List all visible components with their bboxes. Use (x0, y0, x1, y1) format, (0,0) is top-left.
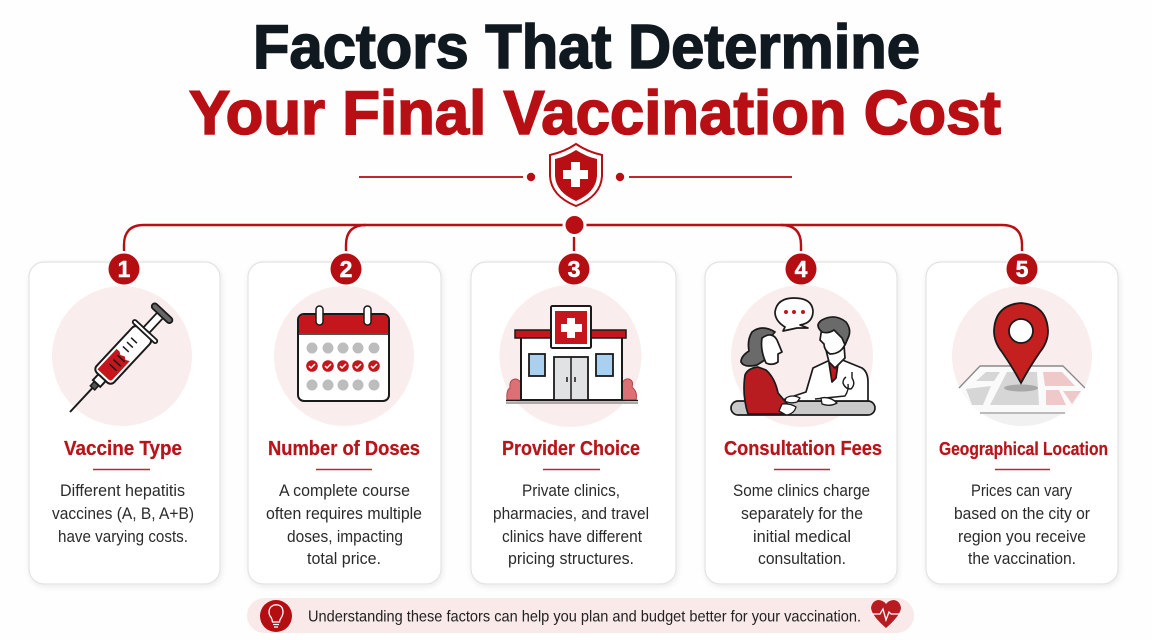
number badges: 4 (795, 256, 808, 282)
description: Some clinics charge (733, 482, 870, 500)
panel: consultation fees (705, 262, 897, 584)
table (731, 401, 875, 415)
heading: Consultation Fees (724, 438, 882, 460)
description: separately for the (741, 505, 863, 523)
icon: syringe (58, 300, 176, 423)
footer text: Understanding these factors can help you plan and budget better for your vaccination. (308, 608, 861, 626)
description (493, 482, 649, 568)
number badges: 5 (1016, 256, 1029, 282)
icon: location pin (994, 303, 1048, 383)
description: often requires multiple (266, 505, 422, 523)
connector lines (124, 214, 1022, 251)
title divider with shield (359, 144, 792, 206)
title: Factors That Determine (253, 13, 920, 82)
doctor (785, 317, 868, 405)
panel: geographical location (926, 262, 1118, 584)
icon: shield (550, 144, 602, 206)
heading: Vaccine Type (64, 438, 182, 460)
description: pharmacies, and travel (493, 505, 649, 523)
description: doses, impacting (287, 528, 403, 546)
heading: Provider Choice (502, 438, 640, 460)
description: have varying costs. (58, 528, 188, 546)
patient (741, 328, 796, 415)
description: region you receive (958, 528, 1086, 546)
title: Your Final Vaccination Cost (189, 79, 1001, 148)
panel: vaccine type (29, 262, 220, 584)
description (52, 482, 194, 546)
description: consultation. (758, 550, 846, 568)
description: the vaccination. (968, 550, 1076, 568)
icon: calendar (298, 306, 389, 401)
icon: light bulb (260, 600, 292, 632)
panel: provider choice (471, 262, 676, 584)
description: clinics have different (502, 528, 642, 546)
icon: heart with pulse (871, 600, 901, 628)
number badges: 3 (568, 256, 580, 282)
icon: map with pin (959, 303, 1085, 413)
description: A complete course (279, 482, 410, 500)
icon: clinic (506, 306, 638, 403)
description: based on the city or (954, 505, 1090, 523)
description: initial medical (753, 528, 851, 546)
number badges (108, 254, 1038, 284)
description (733, 482, 870, 568)
description (954, 482, 1090, 568)
icon: consultation (731, 298, 875, 415)
number badges: 1 (118, 256, 131, 282)
description: Private clinics, (522, 482, 620, 500)
description: Different hepatitis (60, 482, 185, 500)
description: Prices can vary (971, 482, 1073, 500)
description: pricing structures. (508, 550, 634, 568)
number badges: 2 (340, 256, 352, 282)
title (189, 13, 1001, 148)
description: vaccines (A, B, A+B) (52, 505, 194, 523)
description: total price. (307, 550, 381, 568)
panel: number of doses (248, 262, 441, 584)
heading: Number of Doses (268, 438, 420, 460)
footer callout (247, 598, 914, 633)
heading: Geographical Location (939, 439, 1108, 459)
description (266, 482, 422, 568)
speech bubble (775, 298, 813, 331)
